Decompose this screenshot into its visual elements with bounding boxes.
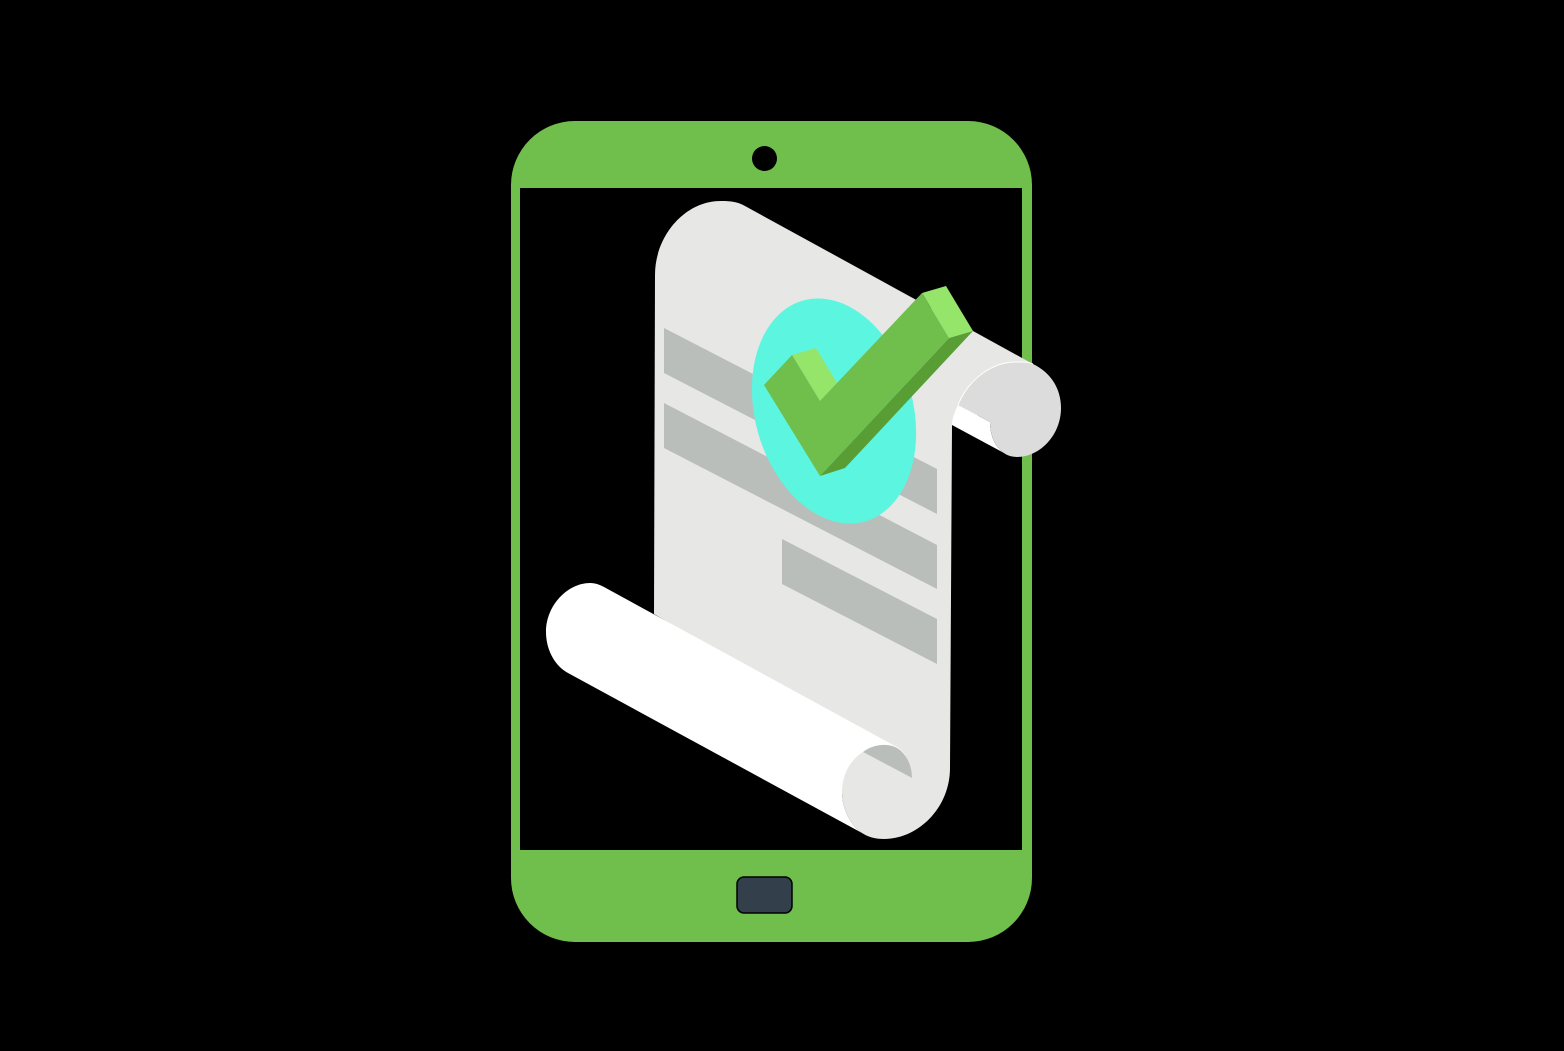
verified badge: [727, 279, 973, 543]
check short arm top: [792, 348, 840, 401]
text line 3: [782, 539, 937, 664]
top roll underside: [952, 405, 1004, 453]
text line 2: [664, 403, 937, 589]
top roll highlight: [958, 362, 1033, 405]
check side shadow: [820, 331, 973, 476]
paper sheet: [654, 201, 1033, 839]
icon: home button: [737, 877, 792, 913]
text line 1: [664, 328, 937, 514]
icon: check mark: [764, 286, 973, 476]
top roll end: [958, 362, 1061, 457]
badge circle: [727, 279, 941, 543]
document scroll: [546, 201, 1061, 839]
phone: [511, 121, 1032, 942]
phone body: [511, 121, 1032, 942]
bottom roll: [546, 583, 912, 833]
phone screen: [520, 188, 1022, 850]
check long arm top: [922, 286, 973, 338]
check front face: [764, 293, 949, 476]
icon: camera: [752, 146, 777, 171]
bottom roll inner curl: [863, 745, 912, 778]
